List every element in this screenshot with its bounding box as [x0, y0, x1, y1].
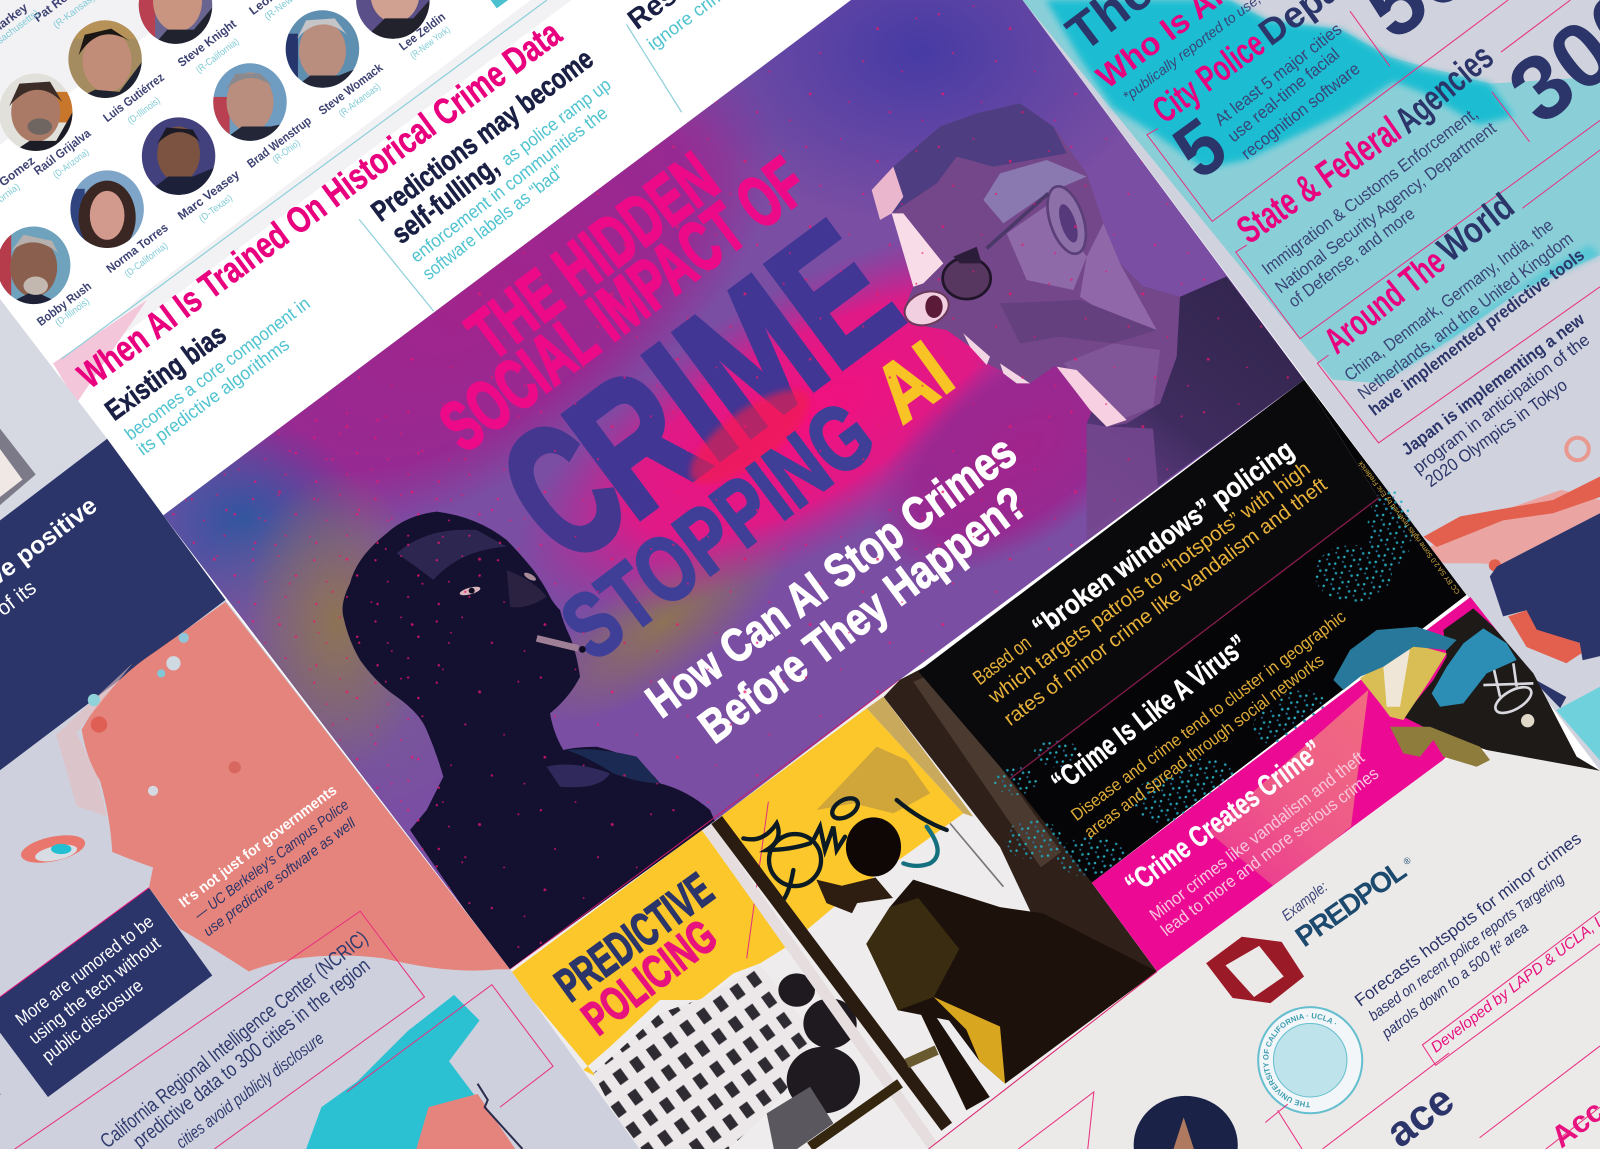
callout: not just governments: use predictive software as well: [201, 815, 359, 940]
text: self-fulfilling predictions: as police ramp up: [497, 74, 615, 170]
title: crime big word: RIME: [533, 184, 933, 556]
section: city police departments: [1145, 0, 1508, 221]
fade at side of head: [983, 160, 1087, 223]
title: social impact of: SOCIAL IMPACT OF: [426, 143, 821, 467]
man with glasses: head (coordinates in crop space): [872, 103, 1180, 427]
callout: rumored use: public disclosure: [37, 974, 147, 1066]
panel: poster centre: [97, 0, 1327, 990]
can top: [1360, 643, 1447, 720]
gold thumb: [1390, 727, 1490, 767]
portrait: Steve Knight: [138, 0, 212, 44]
pink line: [747, 802, 768, 958]
section: around the world: Netherlands, and the United Kingdom: [1354, 228, 1577, 403]
portrait party labels: (R-New York): [408, 25, 453, 62]
portrait party labels: (D-Texas): [197, 193, 235, 225]
subtitle: how can AI stop crimes: [644, 442, 1024, 744]
man with cigarette (coordinates in crop space): [343, 512, 720, 990]
panel: broken windows: rates of minor crime like vandalism and theft: [1000, 474, 1332, 731]
panel: broken windows: [918, 380, 1379, 779]
coral paint stripe: [1423, 477, 1600, 547]
yellow wall: [720, 708, 963, 930]
portrait party labels: (R-Arkansas): [337, 81, 383, 120]
graffiti: [743, 794, 947, 900]
text: forecasts hotspots: patrols down to a 500 ft² area: [1378, 919, 1532, 1043]
section: around the world: World: [1430, 185, 1522, 270]
text: self-fulfilling predictions: Predictions may become: [366, 43, 599, 228]
neck tone: [1080, 223, 1157, 330]
window frame pale: [707, 827, 933, 1147]
section: around the world: Around The: [1316, 241, 1453, 361]
section: state and federal: Immigration & Customs Enforcement,: [1258, 103, 1482, 279]
denser speckles near the left figure: [163, 388, 531, 959]
glasses: [943, 258, 991, 299]
navy map shape: [1490, 513, 1600, 660]
section: state and federal: Agencies: [1387, 36, 1501, 141]
beige frame beside post: [867, 697, 973, 817]
teal fragment: [1556, 687, 1600, 760]
portrait party labels: (R-Ohio): [271, 138, 303, 166]
text: forecasts hotspots: Forecasts hotspots for minor crimes: [1351, 828, 1585, 1010]
coral California shape: [1508, 610, 1582, 663]
portrait labels: Norma Torres: [104, 220, 171, 276]
yellow cloth: [934, 997, 1005, 1084]
section: city police departments: 5: [1158, 102, 1242, 195]
section lines: [1018, 1046, 1600, 1149]
panel: photo strip: [500, 653, 1173, 1149]
panel: bay area and salmon wash: [0, 600, 640, 1149]
panel: crime creates crime: Minor crimes like vandalism and theft: [1145, 747, 1368, 925]
title: the hidden: THE HIDDEN: [453, 138, 732, 375]
man with glasses: shirt: [1087, 277, 1304, 541]
logo: predpol: [1206, 937, 1304, 1003]
map: teal bay area: [306, 995, 522, 1149]
lower neck: [1063, 343, 1160, 420]
panel: broken windows: Based on: [969, 632, 1036, 690]
portrait party labels: [0, 0, 453, 329]
paint speckles: [153, 0, 1327, 980]
section: around the world: China, Denmark, Germany, India, the: [1340, 215, 1557, 385]
panel: crime creates crime: lead to more and more serious crimes: [1157, 763, 1382, 940]
text: self-fulfilling predictions: enforcement in communities the: [406, 102, 611, 266]
portrait: Marc Veasey: [142, 117, 216, 195]
jaw shadow: [1000, 300, 1157, 343]
text: NCRIC: California Regional Intelligence Center (NCRIC): [97, 927, 372, 1149]
panel: crime is like a virus: “Crime Is Like A Virus”: [1045, 629, 1254, 799]
tag on can: [1483, 663, 1535, 718]
panel: congress members and biased data: [0, 0, 720, 456]
section: city police departments: At least 5 major cities: [1211, 19, 1346, 130]
section: city police departments: recognition software: [1237, 58, 1364, 163]
title: AI: AI: [857, 323, 969, 440]
portrait: Lee Zeldin: [356, 0, 430, 39]
title: crime big word: C: [467, 383, 660, 600]
eye: [460, 586, 480, 596]
callout: not just governments: It's not just for governments: [176, 783, 340, 911]
text: existing bias: Existing bias: [100, 318, 232, 427]
figure painting: [816, 817, 1157, 1110]
portrait party labels: (D-California): [123, 240, 170, 280]
scalp highlight: [397, 530, 507, 580]
section: around the world: [1316, 150, 1600, 443]
nose highlight: [507, 570, 547, 607]
callout: rumored use: More are rumored to be: [11, 911, 157, 1030]
section: state and federal: [1229, 0, 1600, 339]
portrait labels: Steve Womack: [316, 60, 386, 118]
portrait: Raúl Grijalva: [0, 74, 72, 151]
portrait: Bobby Rush: [0, 224, 74, 306]
heading: predictive policing: PREDICTIVE: [546, 863, 722, 1011]
throat highlight: [1057, 367, 1127, 427]
arm: [816, 878, 893, 913]
shirt shading: [866, 898, 959, 1010]
title: crime big word: [508, 217, 908, 552]
portrait labels: Brad Wenstrup: [244, 114, 314, 171]
panel: crime is like a virus: areas and spread through social networks: [1080, 650, 1328, 842]
panel: navy positive uses: [0, 439, 226, 770]
brow: [953, 247, 982, 263]
panel: broken windows: which targets patrols to “hotspots” with high: [984, 458, 1314, 709]
portrait: Brad Wenstrup: [213, 63, 287, 141]
hair tip and forehead light: [872, 167, 903, 220]
cheek highlight: [1007, 203, 1087, 290]
legs: [920, 1013, 990, 1110]
portrait: Steve Womack: [286, 10, 360, 88]
portrait party labels: (D-Illinois): [126, 95, 163, 127]
lower fingers: [1432, 628, 1517, 707]
cigarette: [537, 638, 578, 648]
pink mottled paint: [1423, 490, 1600, 566]
distant building on yellow: [817, 747, 930, 813]
text: existing bias: its predictive algorithms: [133, 333, 293, 459]
yellow title block: [510, 830, 787, 1077]
upper finger: [1333, 627, 1457, 690]
pink glow across title: [686, 386, 812, 486]
portrait party labels: (R-California): [194, 36, 242, 76]
heading: predictive policing: POLICING: [572, 910, 726, 1045]
portrait labels: Marc Veasey: [175, 167, 242, 223]
panel: broken windows: “broken windows” policing: [1026, 434, 1299, 643]
city building: [593, 965, 813, 1149]
text: forecasts hotspots: based on recent police reports Targeting: [1366, 870, 1568, 1025]
text: self-fulfilling predictions: software labels as “bad”: [418, 160, 568, 284]
credit text: CC BY SA 2.0 Some rights reserved by Eric Frederick: [1356, 459, 1462, 595]
portrait labels: Bobby Rush: [34, 279, 94, 329]
head: [846, 817, 901, 877]
callout: rumored use: [0, 888, 212, 1097]
text: Japan: program in anticipation of the: [1409, 329, 1593, 478]
portrait labels: Steve Knight: [175, 17, 239, 70]
panel: crime creates crime: “Crime Creates Crime”: [1119, 734, 1329, 902]
bright teal wash: [1046, 0, 1513, 168]
text: NCRIC: predictive data to 300 cities in the region: [129, 955, 374, 1149]
portrait party labels: (D-Illinois): [53, 296, 92, 329]
title: stopping: STOPPING: [544, 382, 892, 679]
dark trees: [778, 973, 860, 1113]
section: state and federal: National Security Agency, Department: [1271, 118, 1500, 297]
nose and chin light: [963, 333, 990, 365]
text: existing bias: becomes a core component in: [120, 292, 314, 444]
subtitle: how can AI stop crimes: How Can AI Stop Crimes: [637, 425, 1025, 727]
wooden post: [884, 663, 1157, 1020]
portrait: Luis Gutiérrez: [68, 20, 142, 98]
ear: [1046, 185, 1088, 256]
chest highlight: [547, 764, 610, 787]
portrait labels: Luis Gutiérrez: [101, 70, 167, 125]
panel: crime creates crime: [1092, 597, 1531, 971]
text: NCRIC: [0, 927, 374, 1149]
collar: [567, 749, 660, 783]
salmon paint blob: [82, 602, 510, 971]
section: city police departments: use real-time facial: [1224, 44, 1343, 146]
panel: right teal and grey: [1022, 0, 1600, 770]
section: state and federal: of Defense, and more: [1284, 203, 1419, 311]
portrait labels: Lee Zeldin: [396, 10, 448, 53]
text: self-fulfilling predictions: self-fulling,: [386, 150, 505, 250]
heading: predictive policing: [546, 863, 726, 1045]
section: state and federal: State & Federal: [1229, 109, 1409, 252]
can body: [1403, 608, 1600, 771]
panel: cream predpol: ®: [1402, 855, 1413, 867]
seal: UCLA: THE UNIVERSITY OF CALIFORNIA · UCLA ·: [1263, 1013, 1336, 1108]
portrait labels: [0, 0, 448, 329]
section: around the world: have implemented predictive tools: [1365, 245, 1588, 420]
portrait labels: Raúl Grijalva: [31, 126, 93, 178]
callout: rumored use: using the tech without: [24, 932, 164, 1048]
seal: UCLA: [1257, 1006, 1364, 1114]
navy fragment: [1530, 677, 1566, 708]
portrait party labels: (D-Arizona): [51, 147, 91, 181]
panel: crime is like a virus: [994, 380, 1466, 883]
icon: spray can and hand (coordinates in crop space): [1333, 608, 1600, 771]
text: Japan: 2020 Olympics in Tokyo: [1421, 375, 1571, 491]
panel: cream predpol: PREDPOL: [1290, 854, 1413, 954]
hair: [892, 103, 1067, 213]
panel: cream predpol: Example:: [1279, 879, 1331, 925]
strip contents in crop space: [510, 697, 1003, 1149]
text: NCRIC: cities avoid publicly disclosure: [172, 1028, 327, 1149]
paint droplet with teal centre: [19, 830, 88, 868]
panel: cream predpol: [928, 750, 1600, 1149]
panel: grey photo corner: [0, 299, 107, 520]
panel: crime is like a virus: Disease and crime tend to cluster in geographic: [1067, 606, 1350, 825]
subtitle: how can AI stop crimes: Before They Happen?: [689, 476, 1036, 753]
window frame dark: [717, 820, 947, 1127]
callout: not just governments: — UC Berkeley's Campus Police: [191, 797, 352, 924]
light teal wash: [1022, 0, 1600, 384]
text: Japan: Japan is implementing a new: [1398, 309, 1588, 459]
seal: police department: [1134, 1096, 1238, 1149]
text: self-fulfilling predictions: [366, 43, 615, 284]
portrait: Norma Torres: [70, 170, 144, 248]
